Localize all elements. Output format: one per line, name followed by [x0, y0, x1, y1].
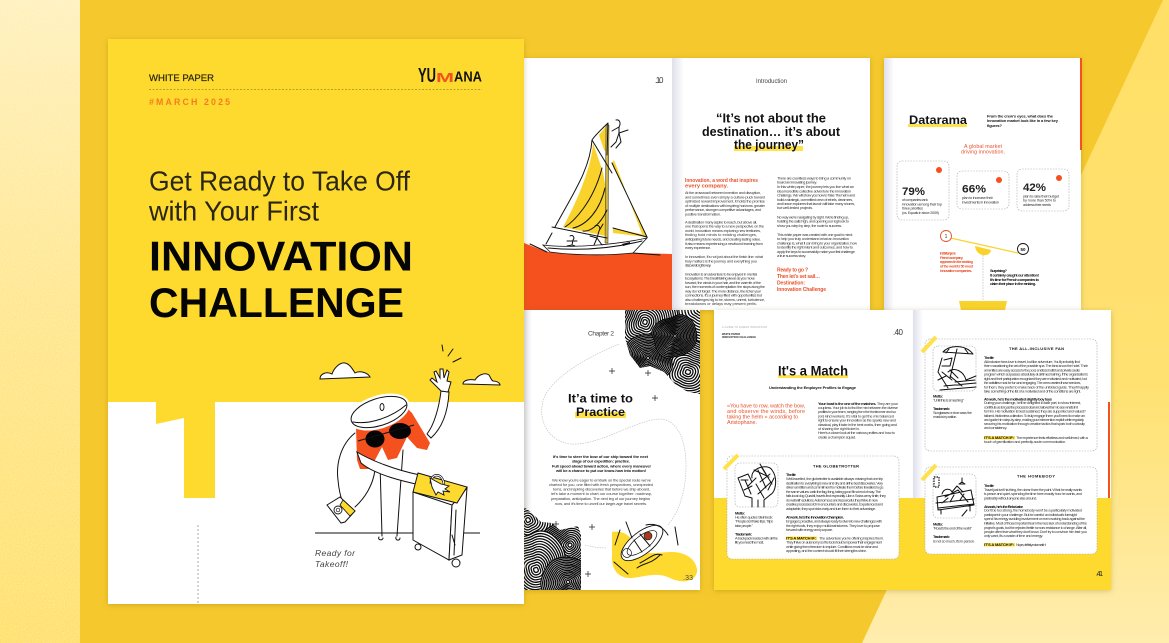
intro paragraph	[818, 401, 899, 440]
right column: There are countless ways to bring a community on	[777, 176, 851, 180]
intro question	[987, 114, 1059, 128]
left column: Innovation, a word that inspires	[685, 178, 758, 184]
title: with Your First	[148, 196, 319, 226]
side notes: Is not so much, it's in person.	[933, 538, 975, 544]
left column: Ecosystems. The breathtaking views as you move	[685, 276, 756, 281]
date: #MARCH 2025	[149, 97, 230, 107]
left column: forward, the winds in your hair, and the warmth of the	[685, 280, 762, 285]
stat card 42%: 42%	[1023, 182, 1046, 194]
body text: turns, and inspiring discoveries that before we ship aboard,	[553, 486, 650, 492]
body text: let's take a moment to chart our course together: roadmap,	[551, 491, 652, 496]
left column: anticipating future needs, and creating lasting value.	[685, 236, 761, 242]
profile text: IT'S A MATCH IF:	[786, 536, 816, 540]
stat card 79%: innovation among their top	[902, 202, 943, 206]
bold intro: stage of our expedition: practice.	[572, 458, 630, 464]
side notes: He often quotes Steinbeck:	[735, 514, 773, 520]
left column: way do not forget. The more distance, the richer your	[685, 288, 762, 294]
heading: Datarama	[909, 113, 967, 127]
profile text: forward with energy and purpose.	[786, 527, 833, 532]
quote heading: “It’s not about the	[716, 112, 826, 126]
tape	[922, 465, 936, 480]
profile text: tailored, frictionless collection. To truly engage them you'll need to make an	[984, 413, 1085, 418]
scale note orange: of the world's 50 most	[940, 264, 974, 268]
plus marks	[553, 368, 658, 577]
right column: a true success story.	[777, 253, 806, 258]
profile text: IT'S A MATCH IF:	[984, 542, 1014, 547]
left column: It also means experiencing a newfound learning from	[685, 241, 764, 246]
right column: board an innovating journey.	[777, 180, 817, 185]
page header: INNOVATION CHALLENGE	[722, 335, 756, 339]
bold intro: will be a chance to put our know-how into motion!	[555, 468, 646, 473]
profile text: touch of gamification and perfectly acute communication.	[984, 439, 1066, 444]
page number .41: .41	[1096, 571, 1103, 578]
right column: to identify the right intent and outcomes, and how to	[777, 245, 854, 250]
illustration: pilot with suitcase	[315, 369, 480, 567]
profile text: At work, he's the Innovation Champion.	[786, 514, 844, 520]
left column: sun, the moments of contemplation: the stops along the	[685, 284, 766, 289]
caption: Takeoff!	[315, 559, 349, 569]
page number .40: .40	[893, 328, 904, 337]
page header	[722, 325, 767, 339]
side notes: Trademark:	[933, 406, 950, 411]
page number .33: .33	[683, 575, 693, 582]
side notes: Trademark:	[933, 534, 950, 539]
orange quote: and observe the winds, before	[727, 409, 805, 415]
stat card 66%: 66%	[962, 184, 986, 196]
title emphasis: CHALLENGE	[149, 279, 404, 326]
profile text: do well with solutions. Autonomous and resourceful, they thrive in new	[786, 498, 878, 502]
right column: but well-tested projects.	[777, 205, 813, 210]
profile text: is peace and quiet, spending the time here exactly how he wants, and	[984, 491, 1082, 496]
stat card 79%: 79%	[902, 186, 925, 198]
header rule	[149, 88, 482, 90]
portrait: homebody	[933, 474, 976, 518]
figure: sailor on deck	[590, 224, 603, 245]
scale note orange: innovative companies.	[940, 269, 972, 273]
tape	[724, 455, 738, 469]
card: the homebody	[922, 465, 1097, 554]
right column: and brave explorers that launch still take many shores,	[777, 201, 855, 206]
intro paragraph: (on) kind workers. It's vital to get the mix balanced	[818, 414, 894, 418]
side notes: A backpack loaded with all the	[735, 536, 779, 540]
stat card 79%: three priorities	[902, 206, 923, 210]
intro paragraph: profiles in your team, ranging from the frontrunner and so	[818, 409, 897, 414]
profile text: appealing, and the content should fit their strengths shine.	[786, 548, 867, 553]
right column: Destination:	[777, 280, 805, 286]
quote heading: the journey”	[734, 138, 804, 152]
left column: of multiple destinations with inspiring horizons: greater	[685, 203, 766, 208]
scale note black: Surprising?	[990, 268, 1008, 273]
right column: challenge is, what it can bring to your organization, how	[777, 240, 857, 245]
profile text: the activities must be fun and engaging. The crew creates those services,	[984, 380, 1081, 385]
profile text: Engaged, proactive, and always ready to dive into new challenges with	[786, 518, 882, 524]
intro paragraph: Here's a closer look at the various profiles and how to	[818, 430, 896, 435]
scale note orange: In 2024, only one	[940, 252, 956, 256]
logo: M	[436, 70, 454, 85]
intro question: figures?	[987, 123, 1003, 128]
profile text: and guide him step-by-step, making your intervention explicit while regularly	[984, 417, 1084, 422]
profile text: people often fear what they don't know. Don't try to convince him fast: you	[984, 529, 1087, 534]
profile text: The life	[984, 355, 995, 360]
left column: every experience.	[685, 245, 711, 250]
illustration: sailboat on orange sea	[524, 120, 672, 310]
stat card 79%: of companies rank	[902, 197, 928, 202]
left column	[685, 178, 766, 306]
chapter label: Chapter 2	[588, 331, 614, 338]
heading: It's a Match	[778, 363, 848, 379]
intro paragraph: right to ensure your innovation as the sparks new and	[818, 418, 896, 422]
portrait: globetrotter	[735, 463, 778, 507]
panel: datarama spread	[884, 58, 1082, 310]
profile text: creative processes rich in encounters and discoveries. Experienced and	[786, 502, 883, 506]
big number 1	[156, 402, 215, 498]
profile text: them vacationing the art of the possible spa. The fans know the hotel. Their	[984, 363, 1089, 368]
card: the all-inclusive fan	[922, 337, 1097, 451]
side notes: Trademark:	[735, 532, 752, 536]
right column: Ready to go ?	[777, 268, 808, 274]
profile text: IT'S A MATCH IF:	[984, 435, 1014, 440]
bold intro: It's time to steer the bow of our ship toward the next	[553, 454, 649, 459]
profile text: The adventure you're offering inspires them.	[819, 536, 884, 540]
profile text	[984, 483, 1088, 547]
left column: Innovation is an adventure to be enjoyed in mental	[685, 272, 757, 276]
body text: preparation, anticipation. The next leg of our journey begins	[551, 496, 650, 501]
card title: THE HOMEBODY	[1017, 474, 1055, 479]
accent bar	[1108, 402, 1110, 498]
logo	[418, 65, 482, 87]
profile text: driven ambition and commitment to motivate them before travellers to go.	[786, 484, 884, 490]
profile text: amenities are easy access to the pool, endless buffet and private seats	[984, 368, 1080, 372]
topographic pattern top right	[625, 310, 700, 394]
illustration: rowing boat on yellow blob	[612, 519, 697, 581]
profile text	[984, 355, 1089, 444]
page header: A GUIDE TO HUMAN INNOVATION	[722, 325, 767, 329]
side notes: Sunglasses or shoe case, the	[933, 410, 973, 415]
side notes: "Until this is smashing"	[933, 398, 965, 402]
intro paragraph: Your boat is the one of the matches. They are your	[818, 401, 899, 406]
body text: now, and it's time to unveil our larger-age travel secrets.	[555, 501, 647, 506]
quote heading	[702, 112, 841, 152]
scale note orange: French company	[940, 256, 964, 260]
dashed route	[542, 344, 686, 548]
profile text: the same values: walk the flag, thing, taking good 'til not end of way. The	[786, 489, 882, 494]
tape	[922, 337, 936, 352]
left column: connections. It's a journey filled with opportunities but	[685, 293, 763, 298]
profile text: The life	[786, 472, 797, 477]
side notes	[735, 510, 779, 544]
stat card 66%: plan to increase their	[962, 195, 994, 200]
profile text: right and their participation recognized they are motivated and motivated, but	[984, 376, 1088, 381]
orange quote	[727, 404, 805, 426]
right column: build a strategic, committed crew of rebels, dreamers,	[777, 197, 853, 202]
left column: optimized reward improvement, it holds the promise	[685, 198, 766, 204]
heading: Practice	[576, 405, 625, 419]
stat card 79%: (vs. Equals in since 2009)	[902, 210, 940, 215]
side notes: "Road's the end of the world"	[933, 526, 973, 530]
right column: This white paper was created with one goal in mind:	[777, 232, 853, 237]
panel: introduction spread	[524, 58, 870, 310]
side notes: take people."	[735, 523, 754, 528]
left column: also challenges big to be, storms, unrest, turbulence,	[685, 297, 765, 302]
side notes: "People don't take trips. Trips	[735, 518, 773, 524]
page header: WHITE PAPER	[722, 332, 740, 336]
caption	[315, 548, 356, 569]
title emphasis: INNOVATION	[149, 232, 413, 280]
title: Get Ready to Take Off	[149, 166, 410, 196]
left column: In innovation, it's not just about the finish line: what	[685, 254, 764, 259]
profile text: only want, it's a waste of time and energy.	[984, 533, 1043, 538]
profile text: Don't be too strong, the homebody won't be a particularly motivated	[984, 508, 1082, 512]
profile text: adaptable, they spot risks early and turn them to their advantage.	[786, 506, 876, 511]
topographic pattern bottom left	[524, 507, 581, 590]
page number .10: .10	[655, 76, 664, 85]
card title: THE GLOBETROTTER	[813, 463, 859, 468]
profile text: During your challenge, he'll be delighted to take part, to show interest,	[984, 400, 1081, 405]
right column: Then let's set sail…	[777, 274, 820, 280]
profile text: while giving them freedom to explore. Conditions must be clear and	[786, 544, 878, 549]
right column: hoisting the sails high, and opening our logbook to	[777, 218, 850, 224]
scale note orange: appeared in the ranking	[940, 260, 974, 264]
card: the globetrotter	[724, 455, 899, 559]
body text	[549, 478, 653, 506]
quote heading: destination… it’s about	[702, 125, 841, 139]
balance scale diagram	[940, 230, 1028, 310]
right column	[777, 176, 857, 293]
scale note black	[990, 268, 1040, 286]
profile text: project's goals, but the rejected fertile rumors resistance to change. After all,	[984, 525, 1087, 530]
side notes	[933, 522, 975, 544]
side notes: Motto:	[933, 522, 943, 526]
logo: ANA	[454, 68, 482, 86]
heading: It’a time to	[568, 392, 633, 406]
label: white paper: WHITE PAPER	[149, 73, 214, 83]
left column: world; innovation means exploring new territories,	[685, 228, 761, 233]
scale note black: It's time for French companies to	[990, 277, 1040, 282]
right column: No way we're navigating by sight. We're finding up,	[777, 214, 849, 219]
orange quote: «You have to row, watch the bow,	[727, 404, 805, 410]
profile text: spend his energy avoiding involvement or even working back against the	[984, 516, 1086, 521]
bold intro: Full speed ahead toward action, where every maneuver	[552, 464, 651, 468]
profile text: contribute as long as the process is clear and allows them to see what's in it	[984, 404, 1079, 410]
scale note orange	[940, 252, 974, 273]
logo: YU	[418, 65, 436, 87]
stat card 66%: investments in innovation	[962, 200, 999, 204]
profile text: for him. His motivation is best sustained; they are supported and valued?	[984, 408, 1087, 414]
profile text: participant in your challenge. But be careful: an individual's foresight	[984, 512, 1078, 517]
left column: discover along the way.	[685, 262, 711, 268]
right column: to help you truly understand what an innovation	[777, 236, 849, 241]
intro question: Innovation market look like in a few key	[987, 118, 1059, 123]
orange quote: taking the helm » according to	[727, 414, 798, 420]
intro paragraph: classical, play it take in the best works, then going and	[818, 422, 897, 427]
left column: performance, stronger competitive advantages, and	[685, 207, 761, 212]
stat card 42%: plan to raise their budget	[1023, 194, 1060, 198]
panel: cover	[108, 39, 524, 604]
profile text: falls local dog Quadril, travels find especially. Like a Swiss army knife, they	[786, 493, 886, 498]
side notes: life you need the most.	[735, 540, 764, 544]
profile text: They thrive on autonomy so the tool should empower their engagement	[786, 540, 883, 544]
title emphasis	[149, 232, 413, 326]
fold line	[197, 525, 199, 604]
profile text: The life	[984, 483, 995, 488]
profile text: Nope, definitely not a match!	[1016, 542, 1046, 547]
profile text: securing his motivation through creative tactics that spark both curiosity	[984, 421, 1085, 426]
body text: We know you're eager to embark on the special route we've	[552, 478, 652, 482]
right column: show you step by step, the route to success.	[777, 223, 842, 228]
profile text: take something of the list of a motivated and of the conditions are right.	[984, 388, 1081, 394]
right column: Innovation Challenge	[777, 287, 826, 293]
intro paragraph: create a champion squad.	[818, 434, 856, 440]
profile text: the right tools, they enjoy multi-brainstorms. They love to propose	[786, 523, 881, 528]
body text: charted for you, one filled with fresh perspectives, unexpected	[549, 482, 653, 487]
heading	[568, 392, 633, 419]
intro question: From the crew's eyes, what does the	[987, 114, 1054, 118]
figure: sailor at stern	[567, 235, 577, 246]
profile text: and consistency.	[984, 425, 1007, 430]
side notes: Motto:	[735, 510, 745, 516]
profile text: All-inclusive fans love to travel, but like adventure. You'll probably find	[984, 359, 1080, 364]
portrait: sunbather	[933, 346, 976, 391]
title	[148, 166, 410, 226]
right column: In this white paper, the journey lets you live what an	[777, 184, 854, 189]
scale note black: claim their place in the ranking.	[990, 281, 1036, 286]
icon: wave sparks	[442, 345, 461, 362]
left column: breakdowns or delays may present perils.	[685, 301, 757, 306]
left column: positive transformation.	[685, 211, 721, 216]
caption: Ready for	[315, 548, 356, 558]
subheading: A global market	[964, 144, 1003, 150]
panel: chapter 2 page	[524, 308, 702, 594]
profile text: destination to: everything is new and dry and all the best discoveries. Very	[786, 480, 883, 486]
profile text: Travel just isn't his thing, the doesn't see the point. What he really wants	[984, 487, 1082, 492]
panel: it's a match spread	[714, 310, 1111, 590]
side notes	[933, 394, 973, 419]
profile text: initiative. Most of those important team themes lack of understanding of the	[984, 520, 1088, 526]
stat card 79%	[897, 161, 949, 220]
profile text: At work, he's the Rebel-ator	[984, 504, 1023, 509]
profile text: for them, they prefer to make back of the unfolded guide. They'll happily	[984, 384, 1089, 390]
side notes: Motto:	[933, 394, 943, 398]
profile text	[786, 472, 886, 553]
stat card 42%	[1017, 169, 1069, 211]
right column: idea incredible collective adventure the Innovation	[777, 188, 851, 193]
accent bar	[1080, 58, 1082, 150]
profile text: At work, he's the motivated slightly boy toys	[984, 396, 1053, 402]
right column: Challenge. We will show you how to Take The helm and	[777, 193, 855, 198]
left column: A destination many aspire to reach, but above all,	[685, 219, 757, 224]
bold intro	[552, 454, 651, 473]
orange quote: Aristophane.	[727, 420, 757, 426]
left column: one that opens the way to a new perspective on the	[685, 224, 765, 229]
subheading: driving innovation.	[961, 150, 1005, 156]
running head: Introduction	[756, 79, 787, 85]
profile text: preferably without anyone else around.	[984, 496, 1037, 500]
intro paragraph: of sharing the right ticket in.	[818, 426, 860, 431]
scale note black: It certainly caught our attention!	[990, 272, 1039, 278]
left column: every company.	[685, 184, 729, 190]
profile text: program which surpasses absolutely at all times training. If the organization's	[984, 372, 1088, 376]
stat card 42%: by more than 50% to	[1023, 198, 1057, 202]
balance scale diagram: 50	[1020, 247, 1026, 252]
profile text: The experience feels effortless and well-timed, with a	[1016, 435, 1089, 440]
card title: THE ALL-INCLUSIVE FAN	[1009, 346, 1064, 351]
left column: truly matters is the journey and everything you	[685, 258, 757, 263]
left column: At the crossroad between invention and disruption,	[685, 190, 761, 195]
right column: apply the keys to successfully make your first challenge	[777, 249, 856, 254]
icon: clouds	[320, 363, 500, 385]
left column: and sometimes even simply a culture-puck toward	[685, 194, 765, 199]
stat card 66%	[957, 171, 1009, 209]
profile text: Well-travelled, the globetrotter is available always missing that one trip	[786, 476, 884, 481]
figure: lookout on mast	[611, 120, 628, 148]
subheading	[961, 144, 1005, 156]
balance scale diagram: 1	[945, 234, 948, 240]
subheading: Understanding the Employee Profiles to Engage	[769, 385, 857, 390]
stat card 42%: address their needs	[1023, 202, 1051, 207]
intro paragraph: coupless. Your job is to find the mix between the diverse	[818, 405, 899, 410]
left column: finding bold minds to existing challenges,	[685, 232, 757, 237]
side notes: mask is in position.	[933, 414, 957, 419]
